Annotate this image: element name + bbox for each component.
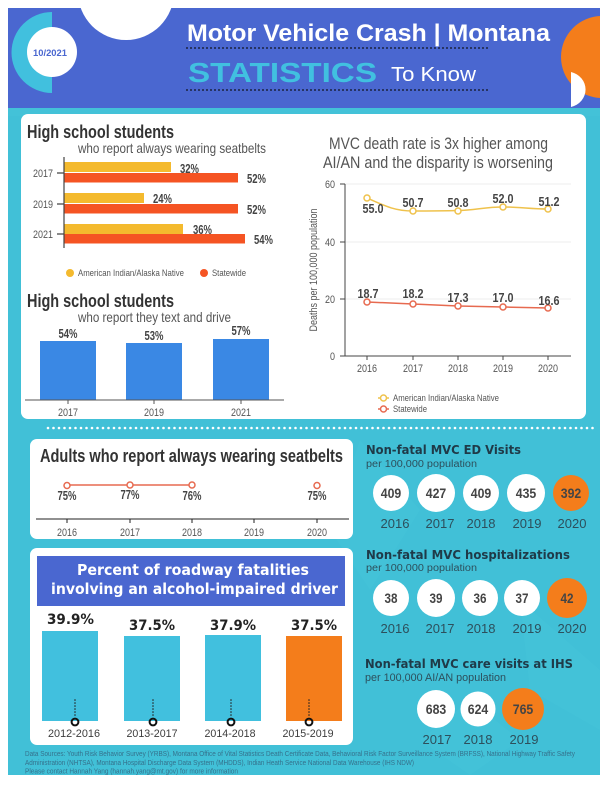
bar chart: seatbelts	[33, 157, 273, 248]
bar chart: alcohol: 37.9%	[210, 618, 256, 634]
bar chart: text and drive: 57%	[232, 323, 251, 338]
panel: adults seatbelts	[30, 439, 353, 539]
main title: Motor Vehicle Crash | Montana	[187, 20, 551, 47]
circles: IHS: 765	[513, 701, 533, 717]
data sources footnote: Administration (NHTSA), Montana Hospital Discharge Data System (MHDDS), Indian Heath Service National Data Warehouse (IHS NDW)	[25, 760, 414, 767]
line chart: adults: 2019	[244, 527, 264, 539]
bar chart: alcohol: 37.5%	[129, 618, 175, 634]
heading: death rate: AI/AN and the disparity is worsening	[323, 153, 553, 172]
line chart: adults: 2016	[57, 527, 77, 539]
circles: hospitalizations: 2016	[381, 621, 409, 636]
dotted rule two	[187, 89, 488, 91]
legend: seatbelts: Statewide	[212, 268, 246, 278]
circles: hospitalizations: 42	[560, 590, 574, 606]
bar chart: seatbelts: 2017	[33, 168, 53, 180]
bar chart: seatbelts: 52%	[247, 171, 266, 186]
subheading: hospitalizations: per 100,000 population	[366, 563, 477, 574]
line chart: adults: 2017	[120, 527, 140, 539]
circles: IHS: 683	[426, 701, 446, 717]
circles: hospitalizations	[373, 578, 587, 636]
bar chart: alcohol: 37.5%	[291, 618, 337, 634]
heading: death rate	[323, 134, 553, 172]
data sources footnote: Please contact Hannah Yang (hannah.yang@mt.gov) for more information	[25, 768, 238, 776]
line chart: death rate: 50.8	[448, 195, 468, 210]
circles: hospitalizations: 2018	[467, 621, 495, 636]
circles: IHS	[417, 688, 544, 747]
circles: ED visits	[373, 474, 589, 531]
circles: IHS: 2018	[464, 732, 492, 747]
bar chart: text and drive: 2019	[144, 407, 164, 419]
line chart: death rate: 2017	[403, 363, 423, 375]
bar chart: seatbelts: 52%	[247, 202, 266, 217]
heading banner: alcohol: involving an alcohol-impaired driver	[51, 580, 339, 598]
heading: death rate: MVC death rate is 3x higher among	[329, 134, 548, 153]
circles: hospitalizations: 2017	[426, 621, 454, 636]
decorative white half disc	[571, 72, 586, 107]
bar chart: alcohol: 2014-2018	[204, 728, 256, 740]
line chart: adults: 77%	[120, 487, 140, 502]
line chart: adults: 2020	[307, 527, 327, 539]
circles: hospitalizations: 2019	[513, 621, 541, 636]
heading: IHS: Non-fatal MVC care visits at IHS	[365, 657, 573, 671]
line chart: death rate: 2018	[448, 363, 468, 375]
circles: ED visits: 2018	[467, 516, 495, 531]
bar chart: alcohol	[42, 612, 342, 740]
circles: ED visits: 2016	[381, 516, 409, 531]
circles: ED visits: 409	[381, 485, 401, 501]
circles: IHS: 624	[468, 701, 488, 717]
data sources footnote	[25, 751, 575, 776]
line chart: death rate: 2019	[493, 363, 513, 375]
circles: hospitalizations: 37	[516, 590, 529, 606]
header banner	[8, 0, 607, 108]
bar chart: text and drive: 53%	[144, 328, 164, 343]
heading: seatbelts: High school students	[27, 122, 174, 142]
date badge	[11, 12, 77, 93]
bar chart: text and drive: 2017	[58, 407, 78, 419]
decorative white half circle	[80, 8, 172, 40]
line chart: death rate: 18.2	[402, 286, 424, 301]
panel: high school students and death rate	[21, 114, 586, 419]
heading banner: alcohol: Percent of roadway fatalities	[77, 561, 309, 579]
subheading: ED visits: per 100,000 population	[366, 459, 477, 470]
legend: death rate	[378, 393, 499, 414]
circles: ED visits: 2020	[558, 516, 586, 531]
line chart: adults: 2018	[182, 527, 202, 539]
line chart: death rate: 2020	[538, 363, 558, 375]
circles: hospitalizations: 38	[384, 590, 398, 606]
line chart: death rate: 60	[325, 179, 335, 191]
circles: hospitalizations: 2020	[558, 621, 586, 636]
legend: seatbelts: American Indian/Alaska Native	[78, 268, 184, 278]
line chart: death rate	[308, 179, 571, 375]
circles: IHS: 2019	[510, 732, 538, 747]
line chart: death rate: Deaths per 100,000 population	[308, 208, 320, 332]
bar chart: seatbelts: 2019	[33, 199, 53, 211]
circles: ED visits: 392	[561, 485, 581, 501]
line chart: adults: 75%	[58, 488, 77, 503]
circles: hospitalizations: 39	[430, 590, 443, 606]
line chart: death rate: 17.0	[492, 290, 514, 305]
bar chart: text and drive: 2021	[231, 407, 251, 419]
line chart: death rate: 17.3	[448, 290, 468, 305]
line chart: adults: 75%	[308, 488, 327, 503]
stat group: ED visits	[366, 443, 589, 531]
legend: seatbelts	[66, 268, 246, 278]
subheading: IHS: per 100,000 AI/AN population	[365, 672, 506, 684]
circles: ED visits: 435	[516, 485, 536, 501]
line chart: death rate: 18.7	[358, 286, 378, 301]
line chart: death rate: 50.7	[402, 195, 424, 210]
line chart: death rate: 20	[325, 294, 335, 306]
line chart: death rate: 52.0	[492, 191, 514, 206]
line chart: death rate: 51.2	[538, 194, 560, 209]
bar chart: alcohol: 2015-2019	[282, 728, 334, 740]
bar chart: seatbelts: 36%	[193, 222, 212, 237]
bar chart: seatbelts: 32%	[180, 161, 199, 176]
heading: text and drive: High school students	[27, 291, 174, 311]
circles: hospitalizations: 36	[474, 590, 487, 606]
statistics subtitle: STATISTICS	[188, 57, 377, 88]
bar chart: seatbelts: 24%	[153, 191, 172, 206]
legend: death rate: Statewide	[393, 404, 427, 414]
bar chart: text and drive	[25, 323, 284, 419]
date badge: 10/2021	[33, 48, 67, 58]
heading: hospitalizations: Non-fatal MVC hospitalizations	[366, 548, 570, 562]
bar chart: alcohol: 2013-2017	[126, 728, 178, 740]
line chart: adults: 76%	[182, 488, 202, 503]
line chart: adults	[36, 482, 349, 539]
circles: ED visits: 2019	[513, 516, 541, 531]
circles: ED visits: 427	[426, 485, 446, 501]
heading banner: alcohol	[37, 556, 345, 606]
line chart: death rate: 2016	[357, 363, 377, 375]
line chart: death rate: 40	[325, 237, 335, 249]
stat group: hospitalizations	[366, 548, 587, 636]
bar chart: text and drive: 54%	[58, 326, 78, 341]
dotted rule one	[187, 47, 488, 49]
panel: alcohol-impaired fatalities	[30, 548, 353, 745]
subheading: text and drive: who report they text and drive	[77, 309, 231, 325]
legend: death rate: American Indian/Alaska Native	[393, 393, 499, 403]
decorative orange circle	[561, 16, 600, 98]
line chart: death rate: 55.0	[362, 201, 384, 216]
to know subtitle: To Know	[391, 64, 477, 86]
circles: IHS: 2017	[423, 732, 451, 747]
bar chart: seatbelts: 54%	[254, 232, 273, 247]
bar chart: seatbelts: 2021	[33, 229, 53, 241]
bar chart: alcohol: 39.9%	[47, 612, 94, 628]
heading: adults: Adults who report always wearing seatbelts	[40, 446, 343, 466]
subheading: seatbelts: who report always wearing seatbelts	[77, 140, 266, 156]
line chart: death rate: 0	[330, 351, 335, 363]
heading: ED visits: Non-fatal MVC ED Visits	[366, 443, 521, 457]
circles: ED visits: 2017	[426, 516, 454, 531]
bar chart: alcohol: 2012-2016	[48, 728, 100, 740]
stat group: IHS care visits	[365, 657, 573, 747]
line chart: death rate: 16.6	[538, 293, 560, 308]
circles: ED visits: 409	[471, 485, 491, 501]
